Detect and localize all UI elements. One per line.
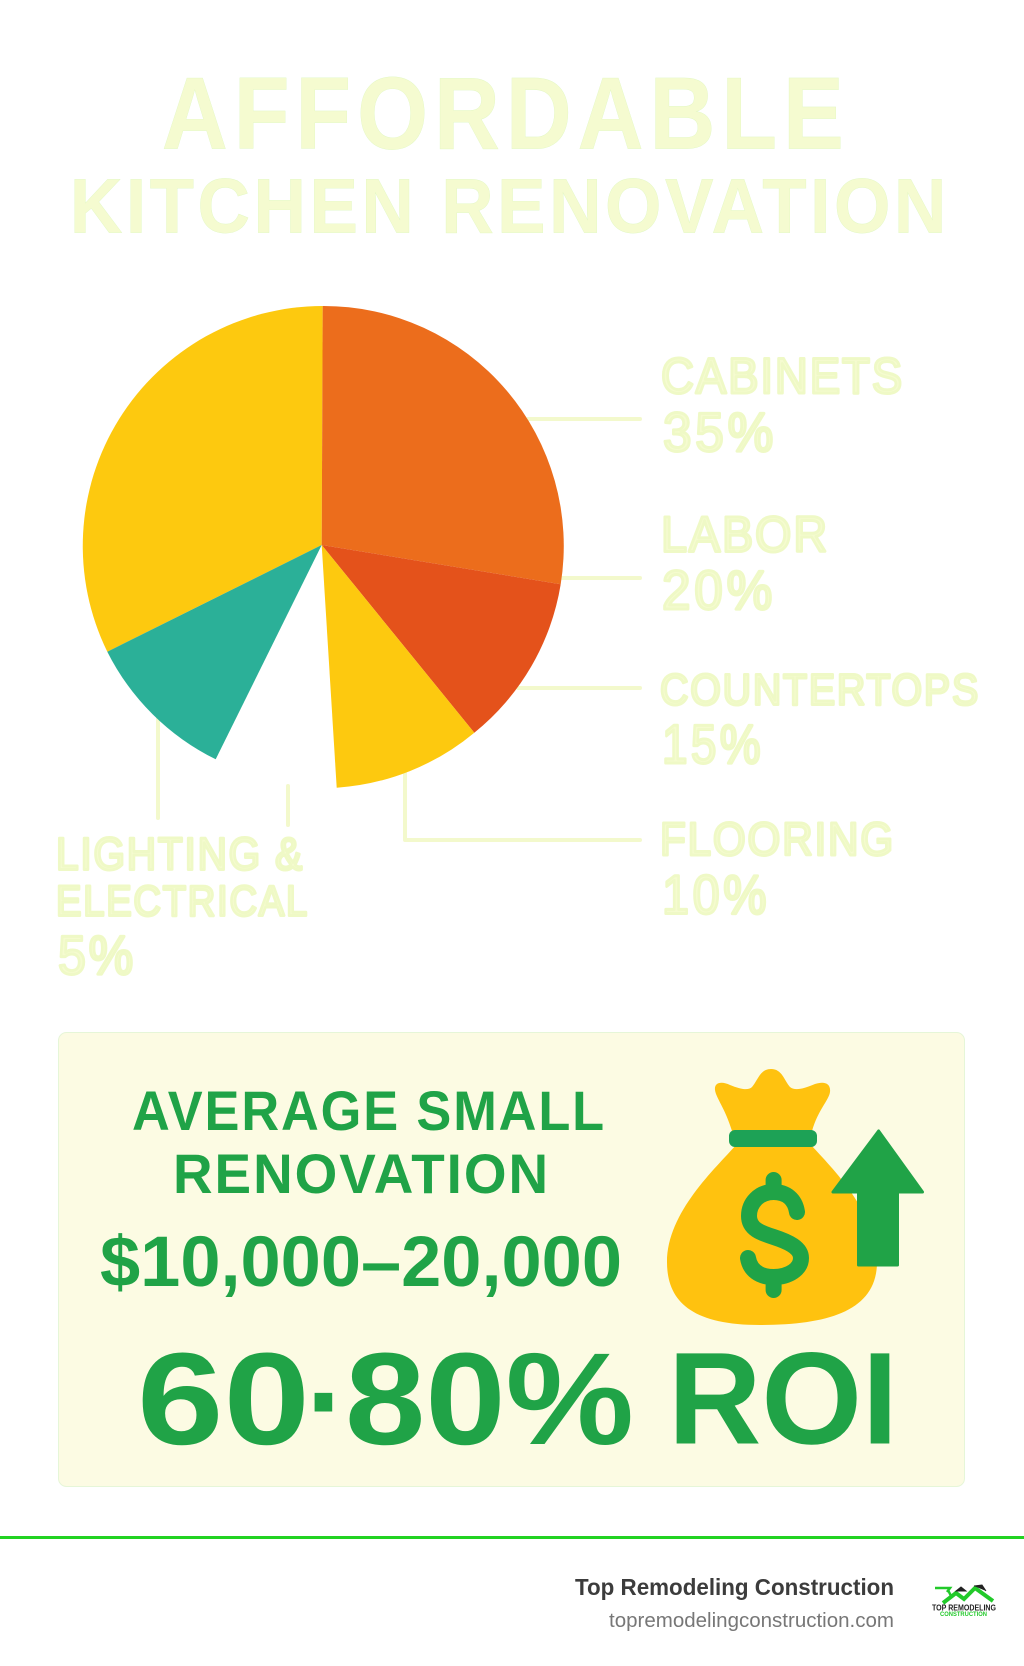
icon: money bag with arrow [667,1069,922,1325]
label: cabinets [661,348,904,463]
pie chart [83,306,564,788]
label: lighting and electrical: 5% [58,924,136,986]
title: KITCHEN RENOVATION [70,163,950,249]
footer rule [0,1536,1024,1539]
label: flooring: FLOORING [660,813,895,865]
logo [932,1585,996,1618]
heading: average small renovation [132,1079,606,1205]
logo: CONSTRUCTION [940,1612,987,1618]
cost range: $10,000–20,000 [100,1223,622,1302]
ROI figures: · [306,1332,348,1471]
label: countertops: COUNTERTOPS [660,666,980,714]
slice: labor red [322,545,561,733]
heading: average small renovation: AVERAGE SMALL [132,1079,606,1142]
title: AFFORDABLE [162,57,850,171]
label: cabinets: CABINETS [661,348,904,404]
label: flooring [660,813,895,926]
ROI figures [137,1325,634,1472]
slice: countertops yellow [322,545,474,788]
label: labor [661,506,829,621]
slice: cabinets orange [322,306,564,584]
label: lighting and electrical: LIGHTING & [56,828,304,880]
label: flooring: 10% [662,864,770,926]
label: countertops [660,666,980,775]
heading: average small renovation: RENOVATION [173,1142,550,1205]
slice: lighting yellow large [83,306,323,652]
footer: company name: Top Remodeling Construction [575,1574,894,1600]
panel: cost and ROI [58,1032,964,1486]
leader lines [158,419,640,840]
label: labor: LABOR [661,506,829,562]
logo: TOP REMODELING [932,1603,996,1613]
label: lighting and electrical [56,828,309,986]
title [70,57,950,249]
ROI label: ROI [668,1324,898,1472]
label: countertops: 15% [662,713,764,775]
label: cabinets: 35% [663,401,777,463]
slice: teal [107,545,322,759]
label: labor: 20% [662,559,776,621]
ROI figures: 80% [345,1325,634,1472]
ROI figures: 60 [137,1325,310,1472]
footer: website: topremodelingconstruction.com [609,1610,894,1632]
label: lighting and electrical: ELECTRICAL [56,878,309,926]
